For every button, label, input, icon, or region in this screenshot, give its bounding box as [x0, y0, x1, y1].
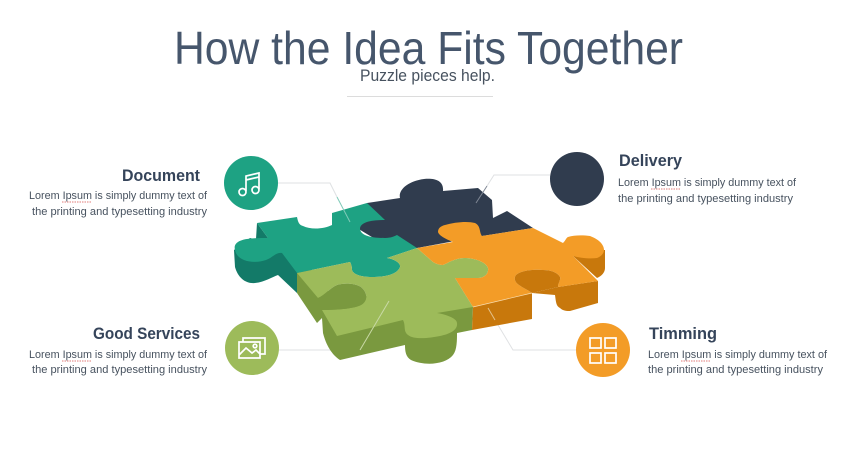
heading: Document — [122, 167, 200, 185]
title: How the Idea Fits Together — [174, 22, 683, 74]
description: the printing and typesetting industry — [618, 193, 794, 205]
icon: navy circle — [550, 152, 604, 206]
item: Timming — [576, 323, 827, 377]
description — [29, 349, 208, 376]
description: Lorem Ipsum is simply dummy text of — [618, 177, 796, 189]
heading: Delivery — [619, 152, 683, 170]
item: Good Services — [29, 321, 279, 376]
teal puzzle piece — [234, 203, 417, 293]
dark navy puzzle piece — [352, 179, 533, 248]
description: the printing and typesetting industry — [32, 364, 208, 376]
description: Lorem Ipsum is simply dummy text of — [648, 349, 827, 361]
green puzzle piece — [297, 248, 488, 364]
subtitle: Puzzle pieces help. — [360, 66, 495, 85]
icon: images — [225, 321, 279, 375]
icon: music note — [224, 156, 278, 210]
puzzle illustration — [234, 179, 605, 364]
description — [29, 190, 208, 218]
icon: grid — [576, 323, 630, 377]
item: Delivery — [550, 152, 796, 206]
item: Document — [29, 156, 278, 218]
heading: Timming — [649, 325, 717, 343]
description: Lorem Ipsum is simply dummy text of — [29, 190, 207, 202]
description: the printing and typesetting industry — [32, 206, 208, 218]
orange puzzle piece — [417, 222, 605, 330]
description — [648, 349, 827, 376]
description: the printing and typesetting industry — [648, 364, 824, 376]
description: Lorem Ipsum is simply dummy text of — [29, 349, 207, 361]
description — [618, 177, 796, 205]
connector overlays on pieces — [337, 186, 495, 350]
heading: Good Services — [93, 325, 200, 343]
connector lines — [278, 175, 576, 350]
